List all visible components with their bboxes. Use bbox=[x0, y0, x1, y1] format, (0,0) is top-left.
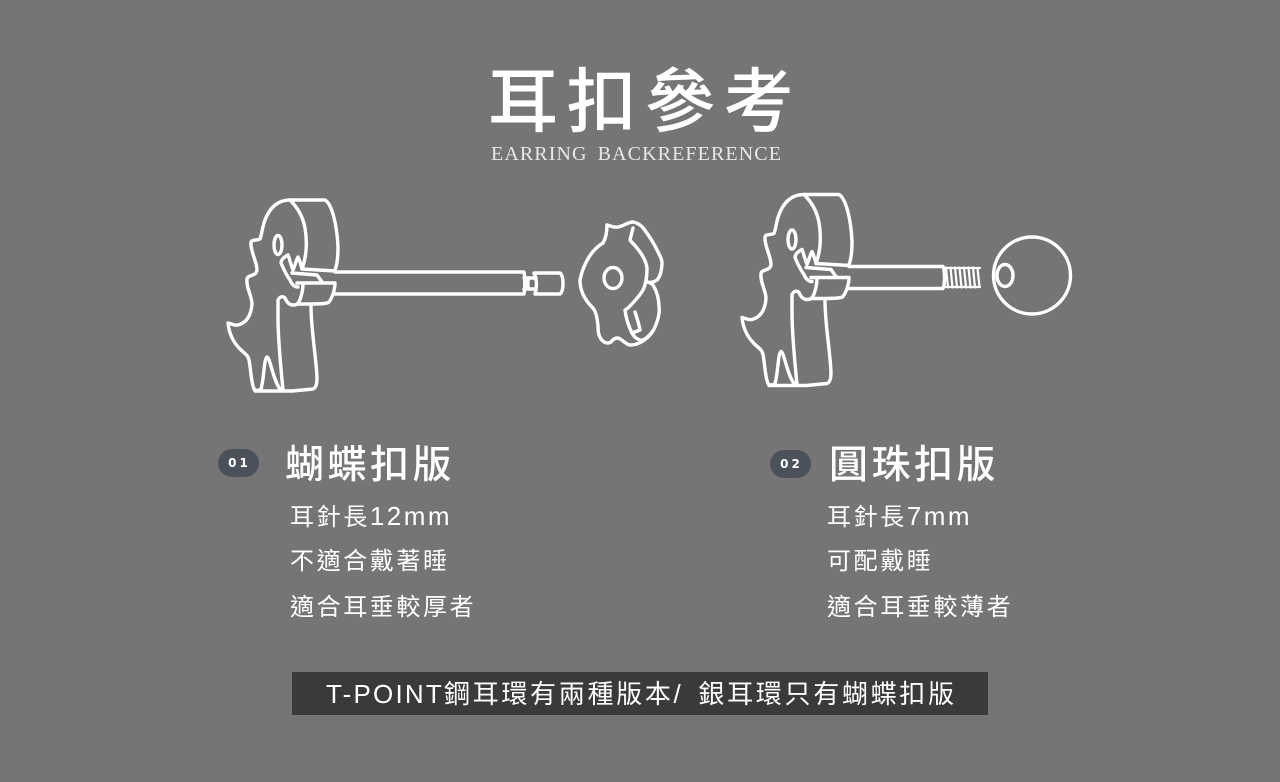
text block: butterfly details: 適合耳垂較厚者 bbox=[290, 594, 476, 621]
text block: butterfly details: 不適合戴著睡 bbox=[290, 548, 450, 575]
text block: butterfly details bbox=[290, 501, 476, 621]
text block: ball details: 可配戴睡 bbox=[827, 548, 933, 575]
icon: butterfly clutch back bbox=[580, 222, 662, 345]
badge 01 bbox=[218, 449, 259, 477]
heading: ball version: 圓珠扣版 bbox=[829, 444, 999, 487]
badge 01: 01 bbox=[228, 456, 251, 470]
text block: ball details: 耳針長7mm bbox=[827, 501, 972, 531]
icon: ball back bbox=[994, 237, 1070, 314]
text block: butterfly details: 耳針長12mm bbox=[290, 501, 452, 531]
text block: ball details bbox=[827, 501, 1013, 621]
bottom note bar: T-POINT鋼耳環有兩種版本/ 銀耳環只有蝴蝶扣版 bbox=[326, 679, 957, 709]
icon: butterfly back earring post bbox=[228, 200, 563, 391]
subtitle: EARRING BACKREFERENCE bbox=[491, 143, 782, 165]
badge 02 bbox=[770, 450, 811, 478]
icon: ball back earring post bbox=[742, 194, 980, 386]
badge 02: 02 bbox=[780, 457, 803, 471]
text block: ball details: 適合耳垂較薄者 bbox=[827, 594, 1013, 621]
title: 耳扣參考 bbox=[488, 63, 802, 141]
bottom note bar bbox=[292, 672, 988, 715]
needle bbox=[334, 272, 525, 294]
heading: butterfly version: 蝴蝶扣版 bbox=[285, 444, 455, 487]
